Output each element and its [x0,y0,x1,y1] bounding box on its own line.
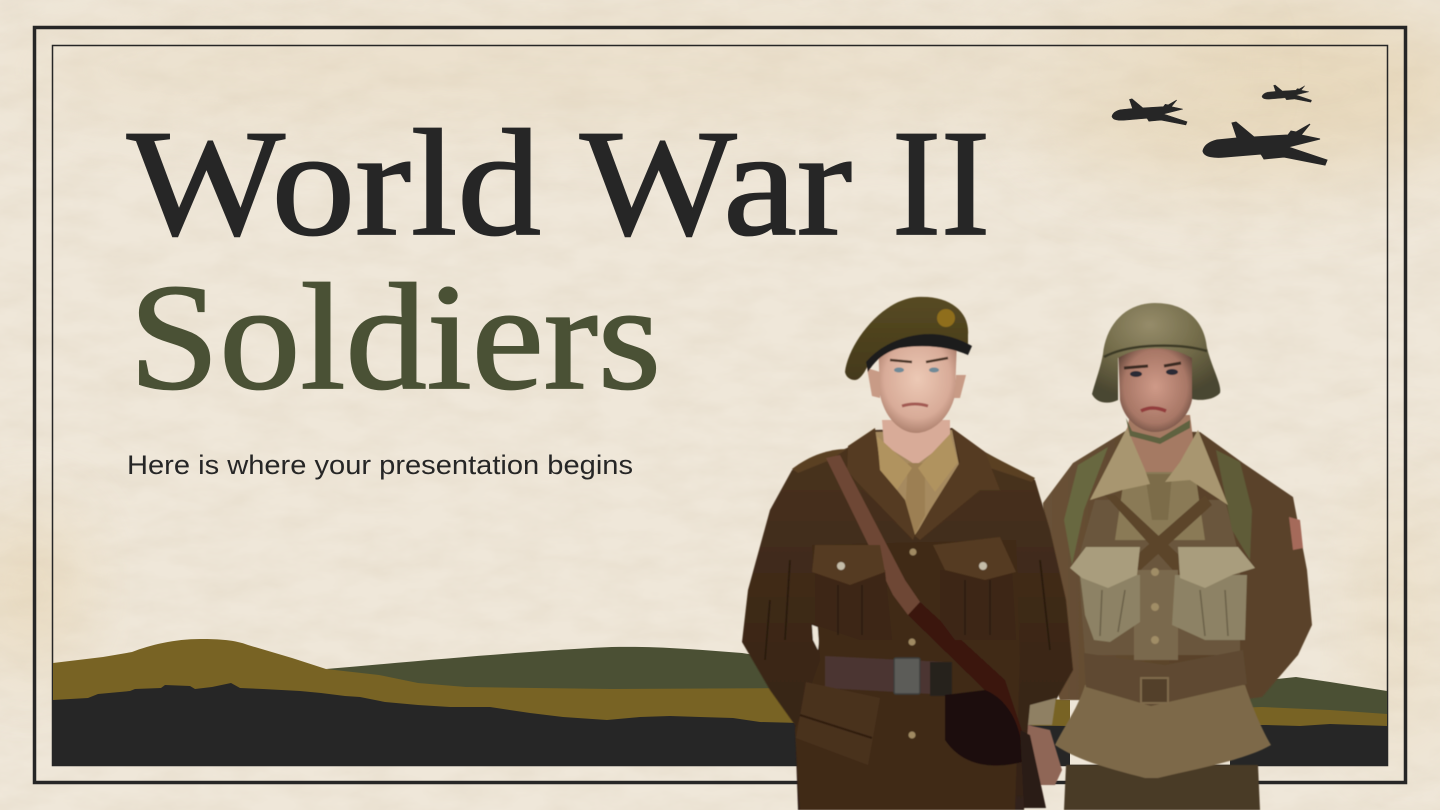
neck [882,420,950,465]
ears [867,368,966,398]
hill: green [326,647,1387,718]
rifle sling [1020,730,1046,808]
plane top [1262,85,1312,102]
pouch right [1172,575,1247,640]
front panel [795,540,1020,810]
cuff [1028,698,1056,725]
icon: airplanes [1112,85,1327,165]
title line 1 [127,99,990,267]
title [127,99,990,421]
hill: dark ground [53,683,1387,765]
breast pocket right [940,570,1016,640]
soldier: American, right [1040,303,1312,810]
tie [1145,474,1172,520]
pouch flap left [1070,547,1140,588]
cross straps [1105,495,1212,578]
jacket and sleeves [742,428,1073,810]
buttons [1151,568,1159,644]
jacket and sleeves [1040,430,1312,700]
plane large [1203,122,1327,165]
flap right [933,537,1016,580]
belt buckle [894,658,920,694]
epaulette left [792,449,847,473]
beret [845,297,968,380]
pocket flap line [800,715,872,738]
title line 1: War [580,99,852,267]
title line 1: II [892,99,990,267]
sleeve folds [765,560,1050,660]
lapel left [847,428,915,540]
eyes and mouth [890,358,948,406]
belt keeper [930,662,952,696]
cap badge [937,309,955,327]
tie [905,463,925,534]
arm gap [812,625,820,650]
collar right [1165,430,1228,505]
holster [945,690,1022,766]
jacket skirt [1055,685,1271,778]
chest [1078,500,1240,655]
belt buckle [1141,678,1168,703]
pocket folds [838,580,990,635]
collar left [1090,428,1150,500]
lapel right [915,428,1000,540]
face [878,340,957,433]
trousers [1064,765,1260,810]
epaulette right [984,452,1035,482]
collar points [877,434,958,492]
shoulder webbing right [1216,450,1252,560]
helmet rim [1104,346,1207,357]
title line 1: World [127,99,541,267]
landscape hills [53,639,1387,765]
title line 2: Soldiers [129,253,661,421]
centre placket [1134,570,1178,660]
shoulder strap dark [908,602,1025,740]
hill: olive [53,639,1387,730]
hand [1026,725,1062,785]
shoulder strap light [826,455,920,615]
face [1118,345,1193,432]
buttons [837,548,987,738]
lower pocket [796,682,880,765]
belt [825,656,950,695]
plane left [1112,99,1187,125]
beret band [866,334,972,372]
shirt [1115,472,1205,540]
pouch folds [1100,590,1228,636]
belt [1084,650,1247,706]
breast pocket left [815,570,892,640]
flag patch [1289,517,1303,550]
eyes and mouth [1124,363,1181,411]
neck [1120,415,1197,482]
soldier: British officer, left [742,297,1073,810]
chin strap [1126,418,1190,444]
subtitle: Here is where your presentation begins [127,450,633,480]
shirt [875,430,960,535]
shoulder webbing left [1064,447,1108,565]
pouch flap right [1178,547,1255,588]
flap left [812,545,885,585]
pouch left [1080,575,1140,642]
helmet [1092,303,1220,403]
